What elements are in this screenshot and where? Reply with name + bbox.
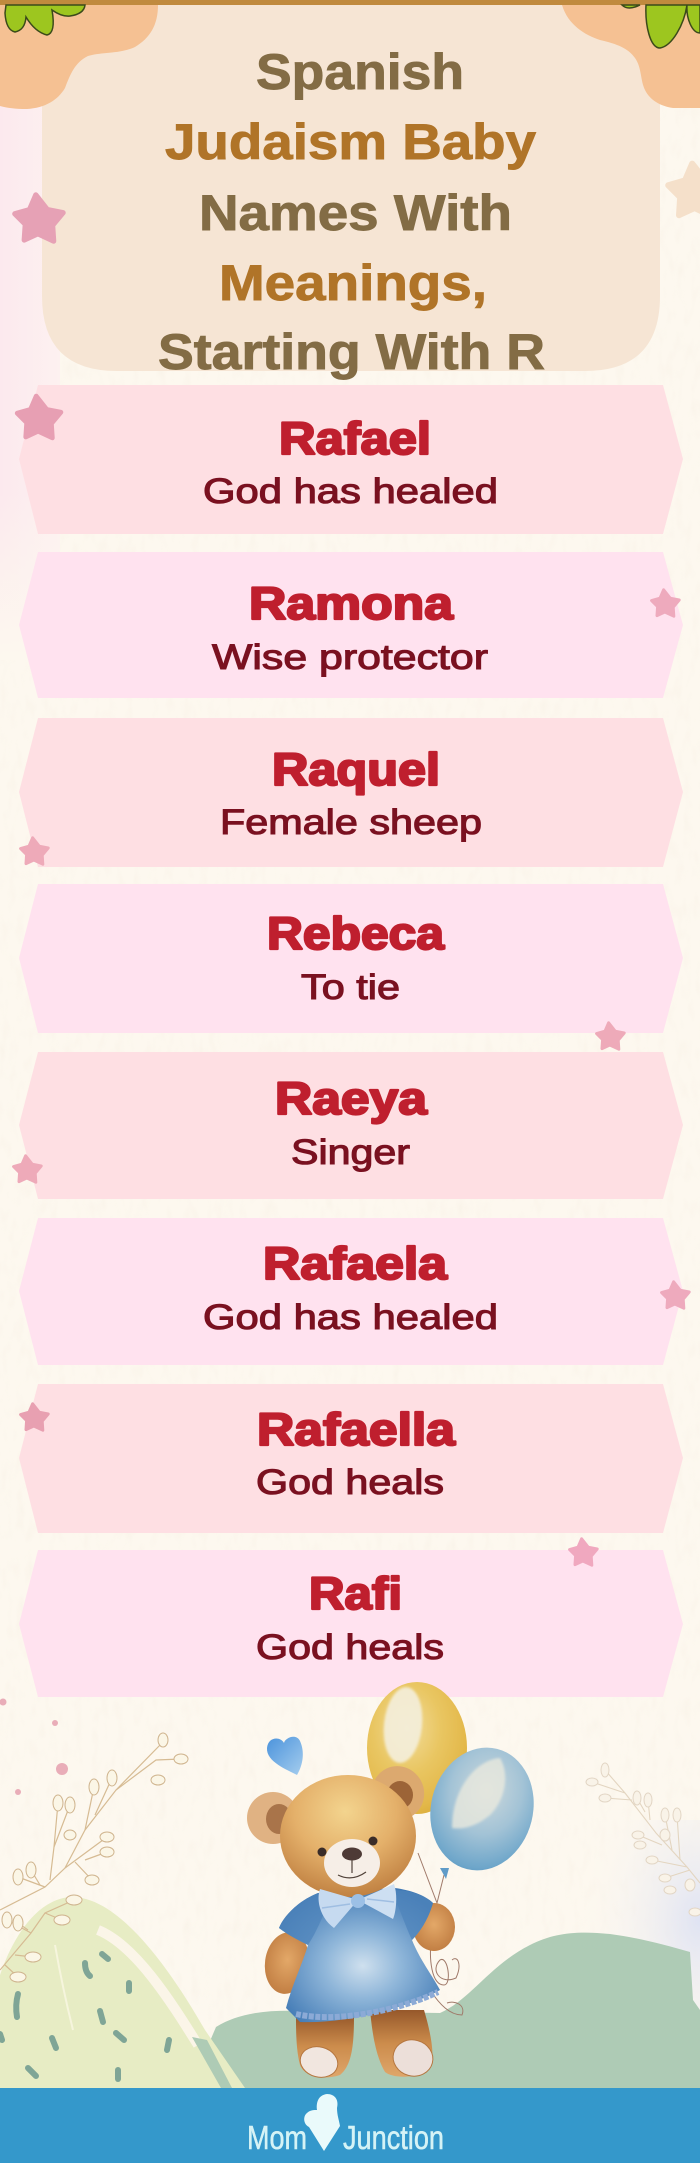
panel: Rebeca: Rebeca — [267, 908, 445, 959]
icon: peach star — [668, 164, 700, 216]
panel: Rafi — [19, 1550, 683, 1697]
logo: MomJunction: Junction — [343, 2119, 444, 2156]
panel: Raquel: Female sheep — [220, 803, 482, 842]
logo: MomJunction: Mom — [247, 2119, 307, 2156]
panel: Rebeca: To tie — [301, 968, 400, 1007]
panel: Rafael — [19, 385, 683, 534]
icon: green leaf left — [5, 5, 85, 35]
logo silhouette — [304, 2094, 340, 2151]
teddy bear — [247, 1758, 455, 2081]
title: Meanings, — [219, 255, 487, 311]
panel: Rafaella: God heals — [256, 1463, 444, 1502]
icon: blue heart — [267, 1737, 303, 1775]
yellow balloon — [367, 1682, 467, 1814]
orange corner: right — [562, 5, 700, 108]
bear legs — [296, 2010, 437, 2081]
bear head — [280, 1775, 416, 1897]
panel: Rafaella — [19, 1384, 683, 1533]
right twigs — [586, 1763, 700, 1916]
bear arms — [261, 1903, 455, 1997]
left twigs — [0, 1733, 188, 1982]
panel: Ramona: Ramona — [249, 578, 454, 629]
panel: Rebeca — [19, 884, 683, 1033]
panel: Raeya: Singer — [291, 1133, 410, 1172]
top border strip — [0, 0, 700, 5]
title: Names With — [199, 185, 512, 241]
panel: Ramona: Wise protector — [212, 638, 488, 677]
footer bar — [0, 2088, 700, 2163]
bear dress — [279, 1888, 440, 2022]
title: Spanish — [256, 44, 464, 100]
logo: MomJunction — [247, 2094, 444, 2156]
panel: title background — [42, 4, 660, 371]
panel: Rafael: God has healed — [203, 472, 498, 511]
title — [158, 44, 545, 380]
panel: Rafael: Rafael — [279, 413, 431, 464]
bear ears — [247, 1758, 433, 1844]
panel: Rafaela — [19, 1218, 683, 1365]
decorative pink stars — [14, 195, 689, 1565]
left hill — [0, 1897, 245, 2088]
panel: Rafaela: Rafaela — [263, 1238, 448, 1289]
title: Starting With R — [158, 324, 545, 380]
panel: Raeya — [19, 1052, 683, 1199]
panel: Ramona — [19, 552, 683, 698]
hill dashes — [0, 1954, 169, 2079]
balloon strings — [418, 1853, 463, 2015]
icon: green leaf right — [622, 5, 700, 48]
decorative pink dots — [0, 1698, 68, 1795]
panel: Rafaela: God has healed — [203, 1298, 498, 1337]
panel: Rafaella: Rafaella — [257, 1404, 456, 1455]
panel: Rafi: God heals — [256, 1628, 444, 1667]
blue balloon — [418, 1737, 546, 1881]
right hill — [190, 1933, 700, 2088]
orange corner: left — [0, 5, 158, 109]
title: Judaism Baby — [165, 114, 536, 170]
panel: Raquel — [19, 718, 683, 867]
blue bow — [319, 1884, 396, 1928]
panel: Raeya: Raeya — [275, 1073, 428, 1124]
panel: Raquel: Raquel — [272, 744, 440, 795]
panel: Rafi: Rafi — [309, 1568, 402, 1619]
